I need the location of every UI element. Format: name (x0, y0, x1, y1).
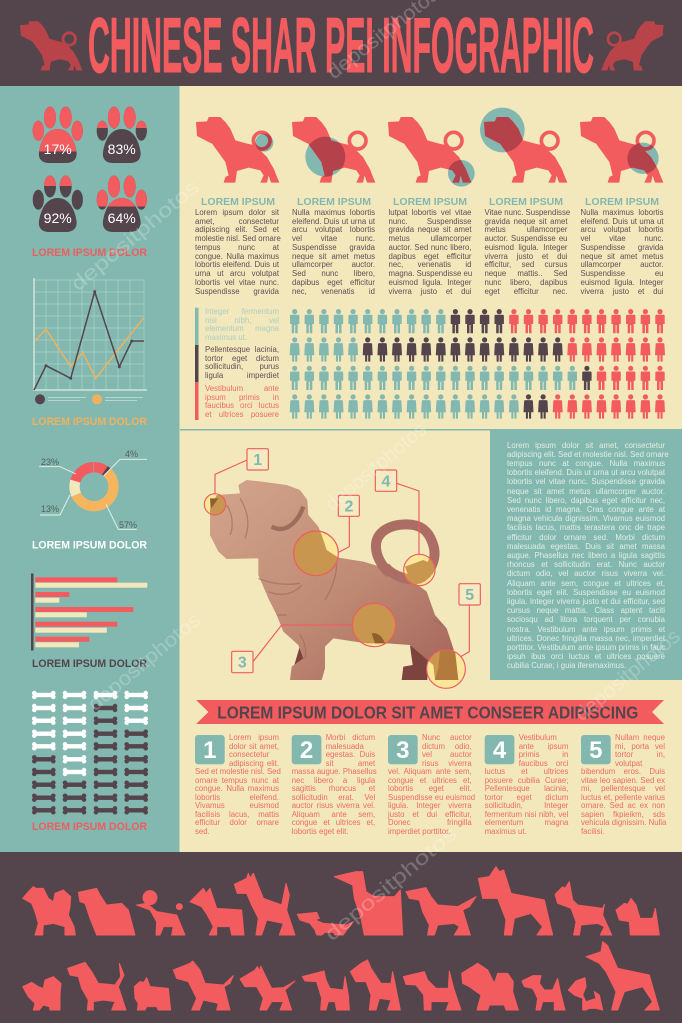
teal panel body text: adipiscing elit. Sed et molestie nisl. Sed ornare (507, 450, 669, 459)
numbered text 3: Donec fringilla (388, 818, 472, 827)
numbered text 2: nec libero a ligula (292, 776, 375, 784)
numbered tiles: 1 (203, 737, 216, 764)
text column 3: dapibus eget efficitur (388, 252, 472, 261)
text column 1: lobortis vel vitae nunc. (195, 278, 279, 287)
legend text teal: elementum magna (205, 324, 279, 333)
teal panel body text: ipsuh ibus orci luctus et ultrices posuere (507, 652, 665, 661)
footer dogs: right half (334, 867, 659, 1010)
teal panel body text: neque sit amet metus ullamcorper auctor. (507, 487, 665, 496)
column headings (201, 196, 659, 208)
text column 2: Sed nunc libero, (292, 269, 375, 278)
column headings: LOREM IPSUM (297, 196, 371, 208)
numbered text 4 (484, 733, 568, 836)
numbered text 5: facilisi. (581, 826, 604, 836)
text column 1: molestie nisl. Sed ornare (195, 234, 281, 243)
teal panel body text: tempus nunc at congue. Nulla maximus (507, 459, 665, 468)
dog diagram 2: chest (292, 117, 375, 183)
text column 5: Suspendisse gravida (580, 243, 664, 252)
numbered tiles: 2 (300, 737, 313, 764)
text column 2: vel vitae nunc. (292, 234, 375, 243)
numbered text 1: efficitur dolor ornare (195, 818, 279, 827)
teal panel body text: Aliquam ante sem, congue et ultrices et, (507, 579, 665, 588)
pictogram people chart (290, 309, 665, 419)
dog diagram 3: paw (388, 117, 475, 187)
numbered text 2: sollicitudin erat. Vel (292, 792, 375, 802)
numbered text 1: lobortis eleifend. (195, 792, 279, 802)
numbered text 2: egestas. Duis (326, 750, 375, 759)
legend text teal: Integer fermentum (205, 307, 279, 316)
paw chart 17%: 17% (44, 141, 72, 157)
dog diagram 1: tail (196, 117, 279, 183)
anatomy diagram: Shar Pei: 4 (382, 474, 391, 491)
icon: header dog left (20, 21, 82, 70)
text column 3 (388, 208, 472, 296)
paw chart 64% (97, 176, 147, 232)
numbered text 1: dolor sit amet, (229, 742, 279, 750)
text column 1: Suspendisse gravida (195, 287, 279, 296)
donut chart: 4% (125, 449, 138, 459)
numbered tiles: 4 (493, 737, 507, 764)
text column 2: Suspendisse gravida (292, 243, 375, 252)
numbered text 4: posuere cubilia Curae; (485, 776, 568, 784)
numbered text 4: sollicitudin, Integer (485, 801, 568, 810)
left teal panel (0, 86, 180, 852)
numbered text 4: elementum magna (485, 818, 568, 827)
legend text teal (205, 307, 279, 342)
numbered text 3: risus viverra (422, 758, 472, 768)
text column 5: arcu volutpat lobortis (580, 225, 664, 234)
numbered text 5: volutpat (615, 758, 642, 768)
legend text coral (205, 384, 279, 419)
text column 1: amet, consectetur (195, 217, 279, 226)
teal panel body text: cubilia Curae; i guia iferemaximus. (507, 661, 626, 670)
text column 3: nunc. Suspendisse (388, 217, 472, 226)
text column 4: euismod ligula. Integer (484, 243, 568, 252)
numbered text 4: fermentum nisi nibh, vel (485, 810, 568, 818)
text column 5: eleifend. Duis ut uma ut (580, 217, 664, 226)
text column 4: efficitur, sed cursus (484, 260, 568, 269)
teal panel body text: ultrices. Donec fringilla massa nec, imperdiet (507, 634, 665, 643)
legend text dark: ligula imperdiet (205, 371, 279, 380)
people legend bar (195, 308, 198, 420)
text column 1: adipiscing elit. Sed et (195, 225, 279, 234)
donut chart: 13% (41, 504, 59, 514)
teal panel body text: Sed nunc libero, dapibus eget efficitur nec, (507, 496, 665, 505)
numbered text 5: luctus et, pellente varius (581, 792, 665, 802)
numbered text 2: lobortis eget elit. (292, 826, 348, 836)
text column 2: arcu volutpat lobortis (292, 225, 375, 234)
numbered text 5: Nullam neque (615, 733, 665, 742)
numbered text 4: primis in (519, 750, 568, 759)
numbered text 3: Suspendisse eu euismod (388, 792, 475, 802)
anatomy diagram: Shar Pei: 5 (465, 587, 474, 604)
column headings: LOREM IPSUM (393, 196, 467, 208)
numbered text 5 (581, 733, 666, 836)
numbered text 1: congue. Nulla maximus (195, 784, 279, 793)
numbered text 3: vel auctor (422, 750, 472, 759)
numbered text 2: sit amet (326, 758, 375, 768)
text column 4: neque mattis.. Sed (484, 269, 568, 278)
anatomy diagram: Shar Pei: 3 (238, 655, 247, 672)
teal panel body text: facilisis lacus, mattis terastera onc de trape (507, 523, 665, 532)
body text teal panel (490, 430, 682, 680)
numbered text 2: Aliquam ante sem, (292, 810, 375, 818)
text column 2 (292, 208, 375, 296)
text column 4: gravida neque sit amet (484, 217, 568, 226)
text column 4: Vitae nunc. Suspendisse (484, 208, 570, 217)
teal panel body text: Lorem ipsum dolor sit amet, consectetur (507, 440, 665, 450)
bar chart (31, 574, 147, 650)
numbered text 4: Vestibulum (519, 733, 557, 742)
watermark: depositphotos (321, 419, 431, 516)
teal panel body text: sociosqu ad litora torquent per conubia (507, 615, 665, 624)
legend text dark: tortor eget dictum (205, 354, 279, 363)
numbered tiles (195, 735, 611, 764)
text column 2: Nulla maximus lobortis (292, 208, 375, 217)
numbered text 3: ligula. Integer viverra (388, 801, 472, 810)
text column 5: Nulla maximus lobortis (580, 208, 664, 217)
text column 5 (580, 208, 664, 296)
numbered text 5: ornare. Sed ac ex non (581, 801, 665, 810)
numbered text 4: tortor eget dictum (485, 792, 568, 802)
numbered text 1: sed. (195, 826, 210, 836)
numbered text 2: congue et ultrices et, (292, 818, 375, 827)
ribbon banner: LOREM IPSUM DOLOR SIT AMET CONSEER ADIPISCING (217, 702, 638, 722)
text column 1: congue. Nulla maximus (195, 252, 279, 261)
numbered text 3: imperdiet porttitor. (388, 826, 450, 836)
teal panel body text: magna vehicula dignissim. Vivamus euismod (507, 514, 665, 523)
numbered text 1: adipiscing elit. (229, 758, 279, 768)
legend text coral: ipsum primis in (205, 393, 279, 402)
text column 5: vel vitae nunc. (580, 234, 664, 243)
text column 2: ullamcorper auctor. (292, 260, 375, 269)
teal panel body text: lobortis eleifend. Duis ut urna ut arcu volutpat (507, 468, 665, 477)
numbered tiles: 5 (589, 737, 602, 764)
text column 4: metus ullamcorper (484, 225, 568, 234)
numbered text 2: malesuada (326, 742, 364, 750)
teal panel body text: malesuada egestas. Duis sit amet massa (507, 542, 665, 551)
text column 3: viverra justo et dui (388, 287, 472, 296)
paw chart 64%: 64% (108, 210, 136, 226)
text column 2: eleifend. Duis ut urna ut (292, 217, 375, 226)
legend text teal: nisi nibh, vel (205, 316, 279, 325)
numbered text 3: vel. Aliquam ante sem, (388, 767, 472, 776)
numbered text 1: facilisis lacus, mattis (195, 810, 279, 818)
legend text dark: sollicitudin, purus (205, 362, 279, 371)
numbered text 1: consectetur (229, 750, 269, 759)
paw chart 83% (97, 106, 147, 163)
donut chart: 23% (41, 457, 59, 467)
text column 3: nec, venenatis id (388, 260, 472, 269)
watermark: depositphotos (67, 176, 204, 296)
numbered text 5: vitae leo sapien. Sed ex (581, 776, 665, 784)
teal panel body text: ligula. Integer viverra justo et dui efficitur, sed (507, 597, 665, 606)
text column 4: eget efficitur nec. (484, 287, 568, 296)
dog diagram 5: hip (580, 117, 663, 183)
legend text coral: et ultrices posuere (205, 410, 279, 419)
bone chart heading: LOREM IPSUM DOLOR (32, 821, 147, 833)
text column 1 (195, 208, 281, 296)
legend text teal: maximus ut. (205, 333, 247, 342)
numbered text 2: Morbi dictum (326, 733, 375, 742)
watermark: depositphotos (84, 609, 205, 716)
teal panel body text: nostra. Vestibulum ante ipsum primis et (507, 625, 665, 634)
paw chart 92%: 92% (44, 210, 72, 226)
paw chart 17% (33, 106, 83, 163)
donut chart: 57% (119, 520, 137, 530)
numbered text 4: luctus et ultrices (485, 767, 568, 776)
text column 5: euismod ligula. Integer (580, 278, 664, 287)
numbered text 3: lobortis eget elit. (388, 784, 472, 793)
column headings: LOREM IPSUM (585, 196, 659, 208)
text column 1: lobortis eleifend. Duis ut (195, 260, 279, 269)
header band (0, 0, 682, 86)
anatomy diagram: Shar Pei (190, 449, 480, 692)
anatomy diagram: Shar Pei: 2 (345, 499, 354, 516)
donut chart (39, 449, 147, 530)
text column 4: nunc libero, dapibus (484, 278, 568, 287)
numbered text 5: tortor in, (615, 750, 665, 759)
icon: header dog right (601, 21, 664, 70)
text column 3: magna. Suspendisse eu (388, 269, 472, 278)
column headings: LOREM IPSUM (201, 196, 275, 208)
line chart heading: LOREM IPSUM DOLOR (32, 416, 147, 428)
watermark: depositphotos (571, 625, 682, 726)
text column 5: viverra justo et dui (580, 287, 664, 296)
numbered text 3: Nunc auctor (422, 733, 472, 742)
numbered text 3 (388, 733, 475, 836)
column headings: LOREM IPSUM (489, 196, 563, 208)
text column 5: neque sit amet metus (580, 252, 664, 261)
footer dogs: left half (23, 873, 353, 1010)
teal panel body text: dictum odio, vel auctor risus viverra vel. (507, 569, 665, 578)
numbered text 5: mi, pellentesque vel (581, 784, 665, 793)
line chart (34, 278, 147, 404)
paw chart 92% (33, 176, 83, 232)
text column 1: urna ut arcu volutpat (195, 269, 279, 278)
teal panel body text (507, 440, 669, 670)
text column 3: gravida neque sit amet (388, 225, 472, 234)
legend text coral: Vestibulum ante (205, 384, 279, 393)
text column 2: nec, venenatis id (292, 287, 375, 296)
watermark: depositphotos (321, 823, 462, 946)
numbered text 4: maximus ut. (485, 826, 527, 836)
numbered text 3: congue et ultrices et, (388, 776, 472, 784)
text column 3: euismod ligula. Integer (388, 278, 472, 287)
numbered text 1 (195, 733, 281, 836)
text column 4: auctor. Suspendisse eu (484, 234, 568, 243)
footer band (0, 852, 682, 1023)
teal panel body text: rhoncus et sollicitudin erat. Nunc auctor (507, 560, 665, 569)
numbered text 5: bibendum eros. Duis (581, 767, 665, 776)
paw heading: LOREM IPSUM DOLOR (32, 247, 147, 259)
numbered text 5: sapien fkpieikm, sds (581, 810, 665, 818)
section divider (180, 429, 682, 430)
numbered text 1: Sed et molestie nisl. Sed (195, 767, 281, 776)
anatomy diagram: Shar Pei: 1 (253, 452, 262, 469)
text column 2: dapibus eget efficitur (292, 278, 375, 287)
numbered text 2 (292, 733, 377, 836)
legend text coral: faucibus orci luctus (205, 401, 279, 410)
numbered text 1: ornare tempus nunc at (195, 776, 279, 784)
text column 3: metus ullamcorper (388, 234, 472, 243)
numbered text 2: sagittis rhoncus et (292, 784, 375, 793)
numbered text 5: mi, porta vel (615, 742, 665, 750)
text column 1: Lorem ipsum dolor sit (195, 208, 279, 217)
numbered text 3: justo et dui efficitur, (388, 810, 472, 818)
numbered text 4: ante ipsum (519, 742, 568, 750)
bone chart (32, 691, 148, 814)
bar chart heading: LOREM IPSUM DOLOR (32, 658, 147, 670)
donut heading: LOREM IPSUM DOLOR (32, 540, 147, 552)
numbered text 4: Pellentesque lacinia, (485, 784, 568, 793)
text column 5: Suspendisse eu (580, 269, 664, 278)
numbered text 4: faucibus orci (519, 758, 568, 768)
text column 3: auctor. Sed nunc libero, (388, 243, 472, 252)
numbered text 1: Lorem ipsum (229, 733, 279, 742)
numbered tiles: 3 (396, 737, 409, 764)
text column 3: lutpat lobortis vel vitae (388, 208, 472, 217)
numbered text 1: Vivamus euismod (195, 801, 279, 810)
teal panel body text: lobortis vel vitae nunc. Suspendisse gravida (507, 477, 665, 486)
text column 1: tempus nunc at (195, 243, 279, 252)
numbered text 2: auctor risus viverra vel. (292, 801, 375, 810)
numbered text 2: massa augue. Phasellus (292, 767, 377, 776)
numbered text 5: vehicula dignissim. Nulla (581, 818, 666, 827)
numbered text 3: dictum odio, (422, 742, 472, 750)
teal panel body text: efficitur dolor ornare sed. Morbi dictum (507, 533, 665, 542)
teal panel body text: cursus neque mattis. Class aptent taciti (507, 606, 665, 615)
text column 2: neque sit amet metus (292, 252, 375, 261)
teal panel body text: lobortis eget elit. Suspendisse eu euismod (507, 588, 665, 597)
teal panel body text: porttitor. Vestibulum ante ipsum primis in fauc (507, 643, 665, 652)
dog diagram 4: head (480, 108, 567, 183)
text column 4: viverra justo et dui (484, 252, 568, 261)
paw chart 83%: 83% (108, 141, 136, 157)
text column 4 (484, 208, 570, 296)
teal panel body text: venenatis id magna. Cras congue ante at (507, 505, 665, 514)
teal panel body text: augue. Phasellus nec libero a ligula sagittis (507, 551, 665, 560)
text column 5: ullamcorper auctor. (580, 260, 664, 269)
legend text dark: Pellentesque lacinia, (205, 345, 279, 354)
legend text dark (205, 345, 279, 380)
